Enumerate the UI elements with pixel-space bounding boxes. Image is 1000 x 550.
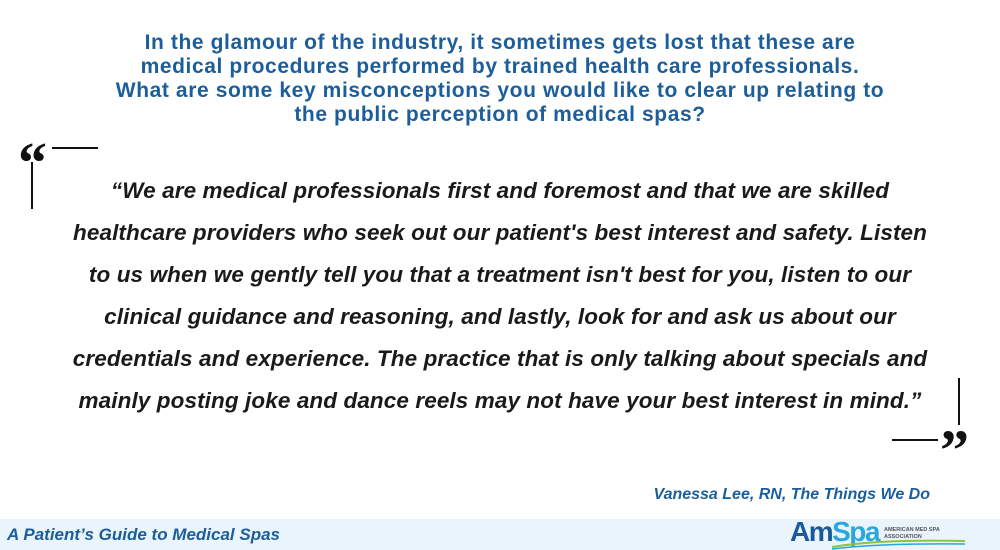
logo: AmSpa — [790, 516, 965, 550]
logo: AmSpa: AmSpa — [790, 516, 879, 547]
icon: closing quote: ” — [940, 418, 969, 483]
quote text — [73, 178, 928, 413]
footer band — [0, 519, 1000, 550]
title: What are some key misconceptions you would like to clear up relating to — [116, 79, 884, 102]
quote text: healthcare providers who seek out our patient's best interest and safety. Listen — [73, 220, 927, 245]
quote text: to us when we gently tell you that a treatment isn't best for you, listen to our — [89, 262, 911, 287]
title: the public perception of medical spas? — [294, 103, 706, 126]
title — [116, 31, 884, 126]
icon: opening quote: “ — [18, 130, 47, 195]
title: In the glamour of the industry, it sometimes gets lost that these are — [145, 31, 855, 54]
quote text: mainly posting joke and dance reels may not have your best interest in mind.” — [79, 388, 921, 413]
title: medical procedures performed by trained health care professionals. — [141, 55, 859, 78]
attribution: Vanessa Lee, RN, The Things We Do — [653, 486, 930, 503]
quote text: “We are medical professionals first and foremost and that we are skilled — [111, 178, 889, 203]
logo: AmSpa: AMERICAN MED SPA — [884, 527, 940, 533]
quote text: clinical guidance and reasoning, and lastly, look for and ask us about our — [104, 304, 896, 329]
logo: AmSpa: ASSOCIATION — [884, 534, 922, 540]
footer title: A Patient’s Guide to Medical Spas — [7, 525, 280, 544]
quote text: credentials and experience. The practice that is only talking about specials and — [73, 346, 927, 371]
